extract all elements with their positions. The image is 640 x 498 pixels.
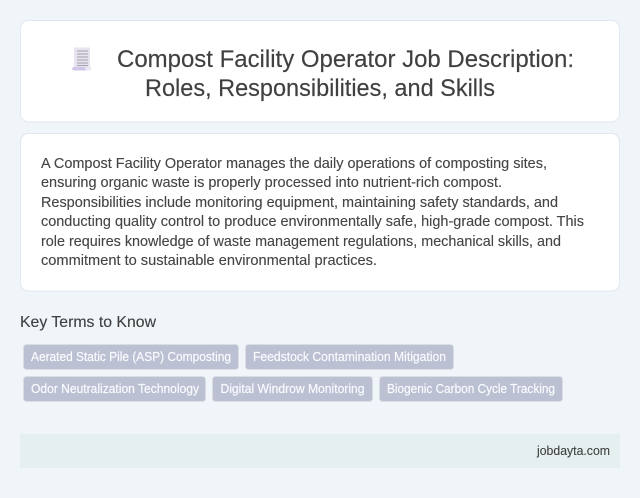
tag: odor neutralization (24, 376, 206, 402)
tag: aerated static pile (24, 344, 238, 370)
footer (20, 434, 620, 468)
tag: biogenic carbon: Biogenic Carbon Cycle Tracking (387, 382, 555, 396)
description text: commitment to sustainable environmental practices. (41, 253, 377, 269)
title: Compost Facility Operator Job Description: (117, 46, 574, 73)
tag: feedstock contamination: Feedstock Contamination Mitigation (253, 350, 446, 364)
tag: biogenic carbon (380, 376, 562, 402)
description text (41, 156, 584, 269)
footer: jobdayta.com (536, 444, 610, 458)
tag: digital windrow: Digital Windrow Monitoring (220, 382, 365, 396)
icon: document scroll (72, 48, 91, 70)
panel: description card (20, 134, 620, 291)
heading: key terms: Key Terms to Know (20, 314, 156, 331)
tag: digital windrow (212, 376, 372, 402)
title (117, 46, 574, 102)
title: Roles, Responsibilities, and Skills (145, 75, 495, 102)
description text: Responsibilities include monitoring equipment, maintaining safety standards, and (41, 195, 558, 211)
description text: ensuring organic waste is properly processed into nutrient-rich compost. (41, 175, 502, 191)
panel: title card (20, 20, 620, 122)
description text: A Compost Facility Operator manages the daily operations of composting sites, (41, 156, 547, 172)
tag: odor neutralization: Odor Neutralization Technology (31, 382, 200, 396)
description text: conducting quality control to produce environmentally safe, high-grade compost. This (41, 214, 584, 230)
tag: aerated static pile: Aerated Static Pile (ASP) Composting (31, 350, 231, 364)
tag: feedstock contamination (246, 344, 454, 370)
description text: role requires knowledge of waste management regulations, mechanical skills, and (41, 234, 561, 250)
